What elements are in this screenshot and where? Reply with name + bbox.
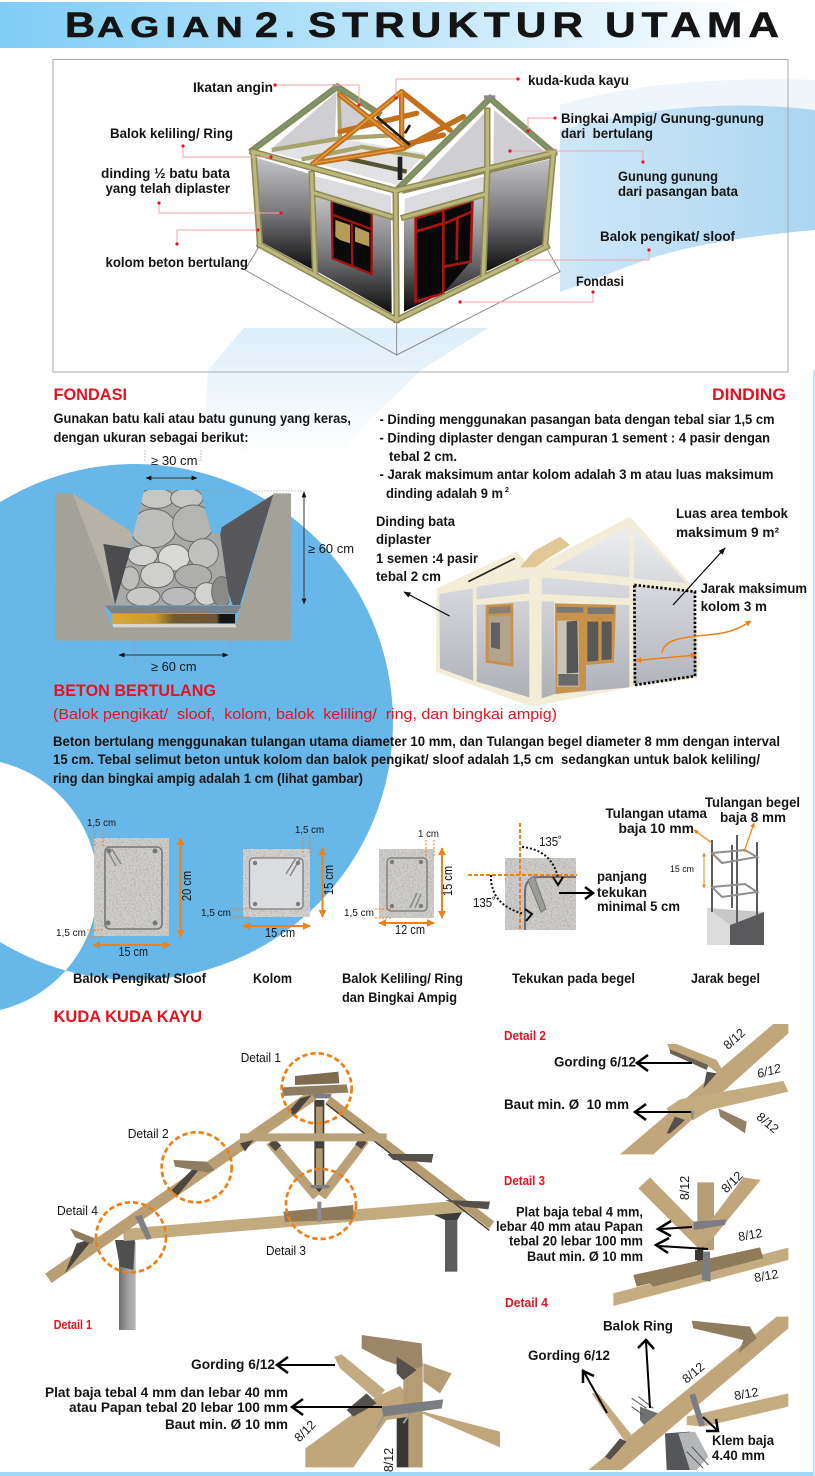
detail 4 heading: Detail 4 [505,1296,548,1310]
text: fondasi intro: dengan ukuran sebagai berikut: [54,430,248,445]
detail 1 heading: Detail 1 [54,1318,92,1332]
illustration: rebar cage with stirrup spacing: baja 8 mm [720,810,786,825]
arrows and labels: detail 1: Plat baja tebal 4 mm dan lebar 40 mm [45,1385,288,1400]
truss detail labels: Detail 3 [266,1244,306,1258]
subheading: beton bertulang elements: (Balok pengikat/ sloof, kolom, balok keliling/ ring, dan bingkai ampig) [53,706,557,723]
section: kolom: 1,5 cm [201,907,231,919]
arrows and labels: detail 3: 8/12 [737,1226,764,1244]
arrows and labels: detail 3: Baut min. Ø 10 mm [527,1249,643,1264]
house callout labels: kolom beton bertulang [106,255,248,270]
arrows and labels: detail 4: Klem baja [712,1433,774,1448]
text: beton bertulang description: Beton bertulang menggunakan tulangan utama diameter 10 mm, dan Tulangan begel diameter 8 mm dengan interval [53,734,780,749]
arrows and labels: detail 2 [504,1026,783,1136]
truss detail labels: Detail 1 [241,1051,281,1065]
text: dinding requirements [380,412,774,501]
heading: fondasi: FONDASI [54,385,127,404]
arrows and labels: detail 3: Plat baja tebal 4 mm, [516,1204,643,1220]
section: balok keliling ring: 15 cm [441,866,455,896]
text: dinding requirements: - Dinding menggunakan pasangan bata dengan tebal siar 1,5 cm [380,412,774,427]
foundation dimension lines: ≥ 30 cm [151,454,198,468]
house callout labels: dari pasangan bata [618,184,738,199]
labels on plastered house: 1 semen :4 pasir [376,551,479,566]
section: balok pengikat sloof [56,817,194,959]
text: beton bertulang description: 15 cm. Tebal selimut beton untuk kolom dan balok pengikat/ sloof adalah 1,5 cm sedangkan untuk balok keliling/ [53,752,760,767]
arrows and labels: detail 1: Baut min. Ø 10 mm [165,1417,288,1432]
heading: dinding: DINDING [712,385,786,404]
background: pale blue swooshes [54,60,815,482]
section: balok keliling ring [344,828,455,937]
house callout labels [101,73,764,289]
title bar: AGIAN [97,12,249,44]
section: balok pengikat sloof: 15 cm [118,945,148,959]
foundation dimension lines: ≥ 60 cm [308,542,354,556]
labels on plastered house: maksimum 9 m² [676,525,780,540]
section: tekukan pada begel [468,823,680,930]
house callout labels: Balok pengikat/ sloof [600,229,735,244]
arrows and labels: detail 1 [45,1357,396,1472]
detail 3 heading: Detail 3 [504,1174,545,1188]
section: kolom: 15 cm [265,926,295,940]
text: beton bertulang description: ring dan bingkai ampig adalah 1 cm (lihat gambar) [53,771,363,786]
captions for reinforcement sections: Jarak begel [691,971,760,986]
labels on plastered house: kolom 3 m [701,599,767,614]
section: balok pengikat sloof: 20 cm [180,871,194,901]
text: dinding requirements: 2 [505,487,509,494]
page edge: bottom and right blue strips [0,370,815,1476]
arrows and labels: detail 4: Gording 6/12 [528,1348,610,1363]
captions for reinforcement sections [73,971,760,1005]
house callout labels: Bingkai Ampig/ Gunung-gunung [561,111,764,126]
section: tekukan pada begel: 135˚ [539,835,562,849]
arrows and labels: detail 3: lebar 40 mm atau Papan [496,1219,643,1234]
arrows and labels: detail 4: 8/12 [733,1385,760,1403]
truss detail labels: Detail 2 [128,1127,169,1141]
truss detail labels: Detail 4 [57,1204,98,1218]
house callout labels: Fondasi [576,274,624,289]
section: balok pengikat sloof: 1,5 cm [87,817,116,829]
arrows and labels: detail 3: 8/12 [753,1267,780,1285]
arrows and labels: detail 4: 4.40 mm [712,1448,765,1463]
illustration: rebar cage with stirrup spacing: 15 cm [670,864,694,874]
section: kolom: 1,5 cm [295,824,324,836]
text: dinding requirements: - Dinding diplaster dengan campuran 1 sement : 4 pasir dengan [380,430,770,446]
title bar: . [285,6,295,45]
labels on plastered house: tebal 2 cm [376,569,441,584]
arrows and labels: detail 2: Baut min. Ø 10 mm [504,1097,629,1112]
text: dinding requirements: tebal 2 cm. [389,449,457,464]
illustration: rebar cage with stirrup spacing [606,795,800,945]
heading: kuda kuda kayu: KUDA KUDA KAYU [54,1007,202,1026]
section: kolom [201,824,336,940]
illustration: detail 1 ridge joint [305,1335,500,1467]
house callout labels: dinding ½ batu bata [101,166,230,181]
house callout labels: Ikatan angin [193,80,273,95]
arrows and labels: detail 4: 8/12 [680,1360,707,1386]
section: balok keliling ring: 1 cm [418,828,439,840]
arrows and labels: detail 4: Balok Ring [603,1318,673,1334]
arrows and labels: detail 1: Gording 6/12 [191,1357,275,1372]
section: balok pengikat sloof: 1,5 cm [56,927,86,939]
section: tekukan pada begel: 135˚ [473,896,496,910]
title bar: B [65,6,95,45]
foundation dimension lines [119,450,354,674]
section: tekukan pada begel: panjang [597,869,647,884]
illustration: detail 2 purlin joint [620,1024,788,1154]
section: tekukan pada begel: tekukan [597,885,647,900]
labels on plastered house: diplaster [376,532,432,547]
leader lines and markers [157,77,651,304]
labels on plastered house: Luas area tembok [676,506,788,521]
arrows and labels: detail 3 [496,1169,780,1285]
detail 2 heading: Detail 2 [504,1029,546,1043]
labels on plastered house: Dinding bata [376,514,455,529]
section: kolom: 15 cm [322,865,336,895]
captions for reinforcement sections: Tekukan pada begel [512,971,635,986]
title bar: STRUKTUR [308,6,589,45]
text: dinding requirements: dinding adalah 9 m [386,486,503,501]
labels on plastered house: Jarak maksimum [701,581,807,596]
section: tekukan pada begel: minimal 5 cm [597,899,680,914]
illustration: plastered house [436,517,700,707]
title bar: 2 [255,6,278,45]
illustration: detail 4 eave joint [588,1317,788,1470]
captions for reinforcement sections: Kolom [253,971,292,986]
illustration: full timber roof truss [48,1053,492,1330]
arrows and labels: detail 1: 8/12 [292,1418,319,1445]
background: large blue circle with white crescent [0,464,393,1014]
section: balok keliling ring: 12 cm [395,923,425,937]
arrows and labels: detail 3: 8/12 [678,1176,692,1200]
arrows and labels: detail 3: tebal 20 lebar 100 mm [509,1234,643,1248]
illustration: rebar cage with stirrup spacing: Tulangan begel [705,795,800,810]
section: balok keliling ring: 1,5 cm [344,907,374,919]
panel: house overview frame [53,60,788,372]
text: dinding requirements: - Jarak maksimum antar kolom adalah 3 m atau luas maksimum [380,467,774,482]
house callout labels: yang telah diplaster [106,181,231,196]
illustration: main house structure [245,84,560,355]
arrows and labels: detail 3: 8/12 [719,1169,746,1196]
illustration: foundation cross-section [55,488,291,641]
arrows and labels: detail 2: 8/12 [721,1026,748,1052]
truss detail labels [57,1051,306,1258]
title bar [0,2,815,48]
arrows and labels: detail 2: 8/12 [754,1110,781,1136]
text: fondasi intro: Gunakan batu kali atau batu gunung yang keras, [54,411,351,426]
house callout labels: dari bertulang [561,126,653,141]
illustration: rebar cage with stirrup spacing: Tulangan utama [606,806,707,821]
captions for reinforcement sections: Balok Pengikat/ Sloof [73,971,206,986]
arrows and labels: detail 4 [528,1318,774,1463]
house callout labels: Gunung gunung [618,169,718,184]
labels on plastered house [376,506,807,614]
heading: beton bertulang: BETON BERTULANG [54,681,216,700]
captions for reinforcement sections: dan Bingkai Ampig [342,990,457,1005]
foundation dimension lines: ≥ 60 cm [151,660,196,674]
house callout labels: Balok keliling/ Ring [110,126,233,141]
title bar: UTAMA [605,6,785,45]
arrows and labels: detail 2: 6/12 [755,1061,783,1081]
text: fondasi intro [54,411,351,445]
arrows and labels: detail 2: Gording 6/12 [554,1054,636,1070]
text: beton bertulang description [53,734,780,786]
house callout labels: kuda-kuda kayu [528,73,629,88]
arrows and labels: detail 1: 8/12 [382,1448,396,1472]
illustration: rebar cage with stirrup spacing: baja 10 mm [618,821,694,836]
arrows on plastered house [404,548,751,660]
captions for reinforcement sections: Balok Keliling/ Ring [342,971,463,986]
illustration: detail 3 king post joint [613,1177,788,1306]
arrows and labels: detail 1: atau Papan tebal 20 lebar 100 mm [69,1400,288,1415]
